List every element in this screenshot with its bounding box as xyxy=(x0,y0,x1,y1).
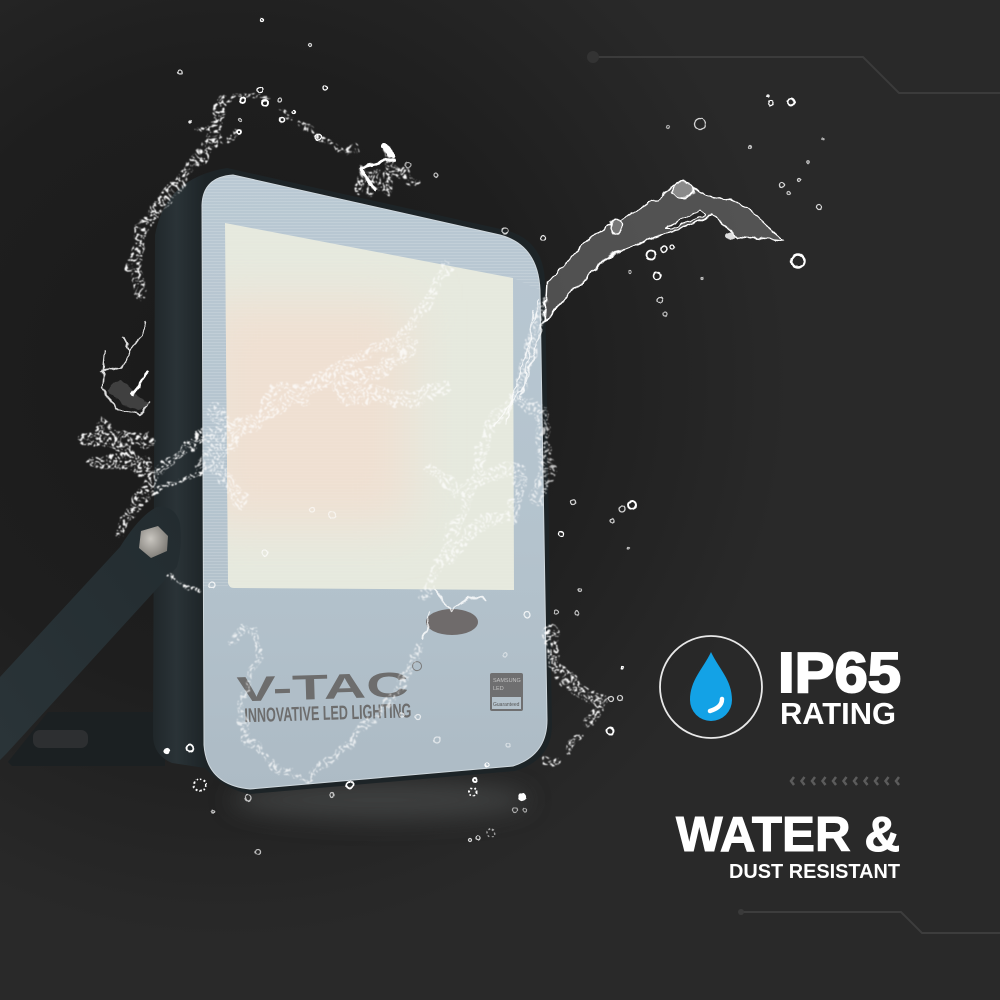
heading: water and dust resistant: WATER & xyxy=(676,808,900,862)
bolt xyxy=(139,526,168,558)
V-TAC logo: INNOVATIVE LED LIGHTING xyxy=(244,700,412,727)
floodlight xyxy=(0,168,552,794)
circuit line: top right xyxy=(587,51,1000,93)
Samsung LED badge: SAMSUNG xyxy=(493,678,521,684)
circuit line: bottom right xyxy=(738,909,1000,933)
splash: fine water lines and right arc xyxy=(102,147,783,640)
motion sensor xyxy=(426,609,478,635)
splash: droplets xyxy=(164,18,824,854)
heading: IP65 rating: IP65 xyxy=(778,641,901,705)
heading: IP65 rating xyxy=(778,641,901,731)
water splash xyxy=(87,18,824,854)
bracket foot xyxy=(8,712,165,766)
floor reflection xyxy=(230,780,530,820)
V-TAC logo xyxy=(236,661,423,727)
splash: speckled streams off the panel xyxy=(87,94,603,762)
divider: chevrons xyxy=(791,777,899,785)
Samsung LED badge xyxy=(490,673,523,711)
V-TAC logo: V-TAC xyxy=(236,665,409,709)
Samsung LED badge: LED xyxy=(493,686,504,692)
icon: water drop in circle xyxy=(660,636,762,738)
ribbed panel texture xyxy=(202,175,540,588)
heading: IP65 rating: RATING xyxy=(780,696,896,731)
LED lens xyxy=(225,223,514,590)
splash: speckled streams on the panel xyxy=(202,267,548,778)
heading: water and dust resistant: DUST RESISTANT xyxy=(729,860,900,883)
housing xyxy=(153,168,552,794)
front panel xyxy=(202,175,547,789)
Samsung LED badge: Guaranteed xyxy=(493,702,520,708)
bracket arm xyxy=(0,507,181,760)
